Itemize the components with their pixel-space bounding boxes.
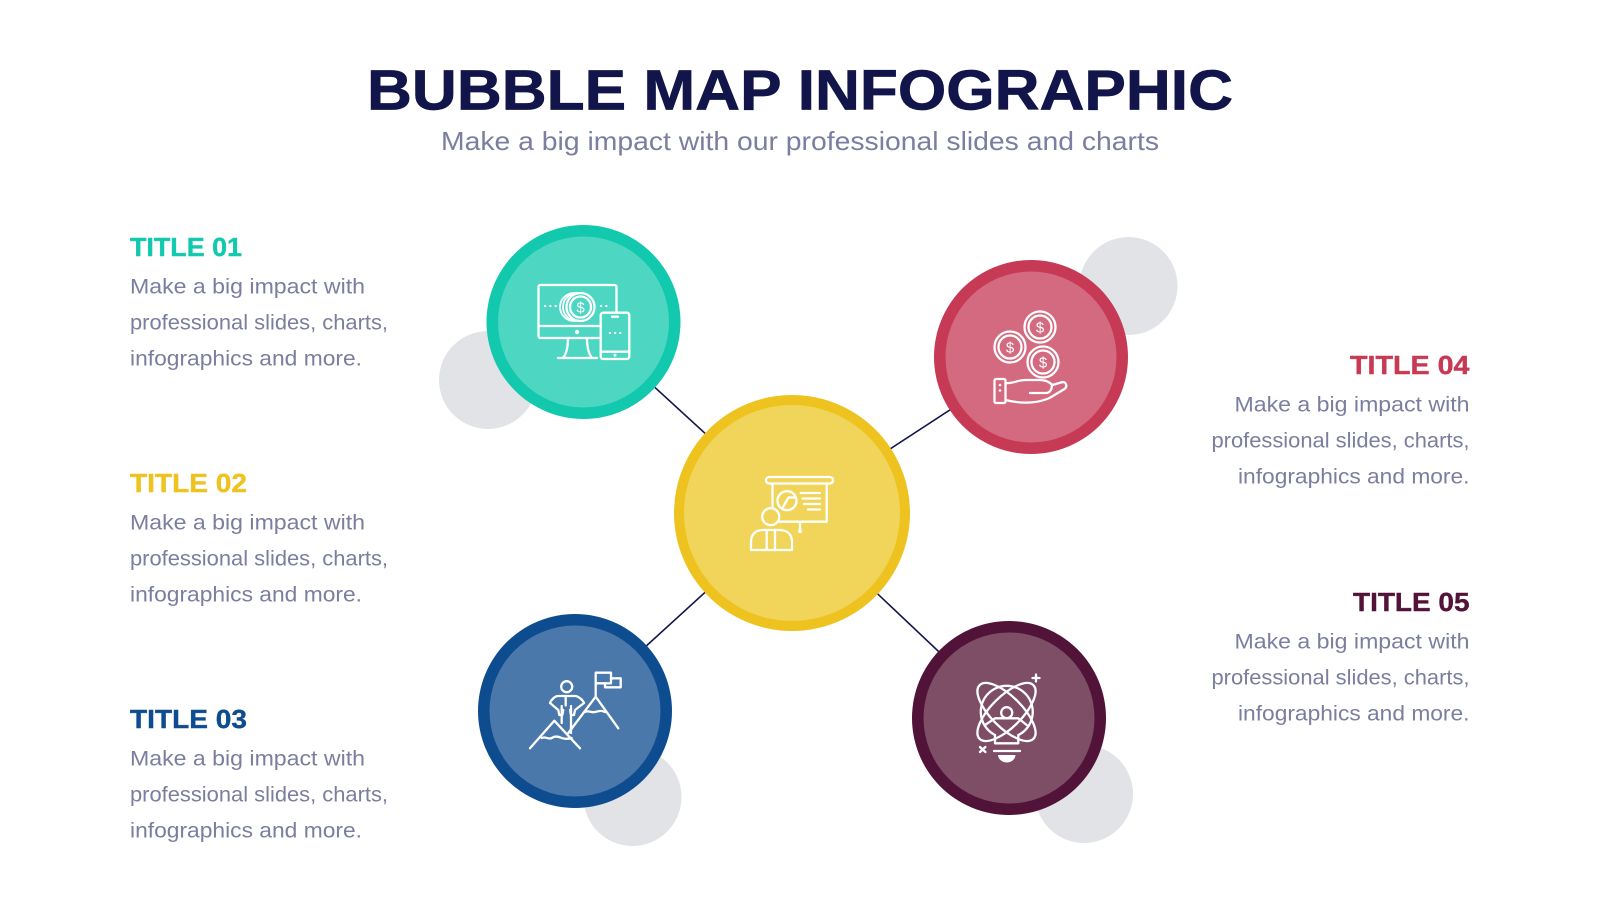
text block: title 05: professional slides, charts, [1212,665,1470,689]
icon: person on mountain with flag [530,673,621,748]
text block: title 02: Make a big impact with [130,510,365,534]
text block: title 02: infographics and more. [130,582,362,606]
text block: title 05: Make a big impact with [1234,629,1470,653]
text block: title 01: professional slides, charts, [130,310,388,334]
title: BUBBLE MAP INFOGRAPHIC [367,58,1233,122]
icon: monitor and phone with coin: $ [576,300,585,316]
bubble: central yellow [674,395,910,631]
text block: title 05 [1212,587,1470,725]
icon: hand with coins [994,312,1066,403]
text block: title 01: TITLE 01 [130,232,242,262]
bubble 03: blue [478,614,672,808]
text block: title 05: infographics and more. [1238,701,1470,725]
icon: hand with coins: $ [1036,320,1045,336]
text block: title 03: Make a big impact with [130,746,365,770]
text block: title 03: TITLE 03 [130,704,247,734]
text block: title 02 [130,468,388,606]
subtitle: Make a big impact with our professional slides and charts [441,126,1159,156]
text block: title 03: infographics and more. [130,818,362,842]
icon: hand with coins: $ [1039,354,1048,372]
text block: title 05: TITLE 05 [1353,587,1470,617]
bubble 05: plum [912,621,1106,815]
text block: title 04 [1212,350,1470,488]
text block: title 02: professional slides, charts, [130,546,388,570]
text block: title 01: infographics and more. [130,346,362,370]
bubble 04: red [934,260,1128,454]
text block: title 01 [130,232,388,370]
text block: title 04: infographics and more. [1238,464,1470,488]
icon: presenter with board [751,477,833,550]
connector lines [575,322,1031,718]
bubble 01: teal [486,225,680,419]
text block: title 01: Make a big impact with [130,274,365,298]
text block: title 02: TITLE 02 [130,468,247,498]
text block: title 03: professional slides, charts, [130,782,388,806]
text block: title 04: professional slides, charts, [1212,428,1470,452]
icon: hand with coins: $ [1006,340,1015,356]
text block: title 03 [130,704,388,842]
text block: title 04: TITLE 04 [1350,350,1470,380]
decorative grey circles [439,237,1178,846]
icon: atom light bulb [969,674,1044,762]
icon: monitor and phone with coin [538,285,629,359]
text block: title 04: Make a big impact with [1234,392,1470,416]
